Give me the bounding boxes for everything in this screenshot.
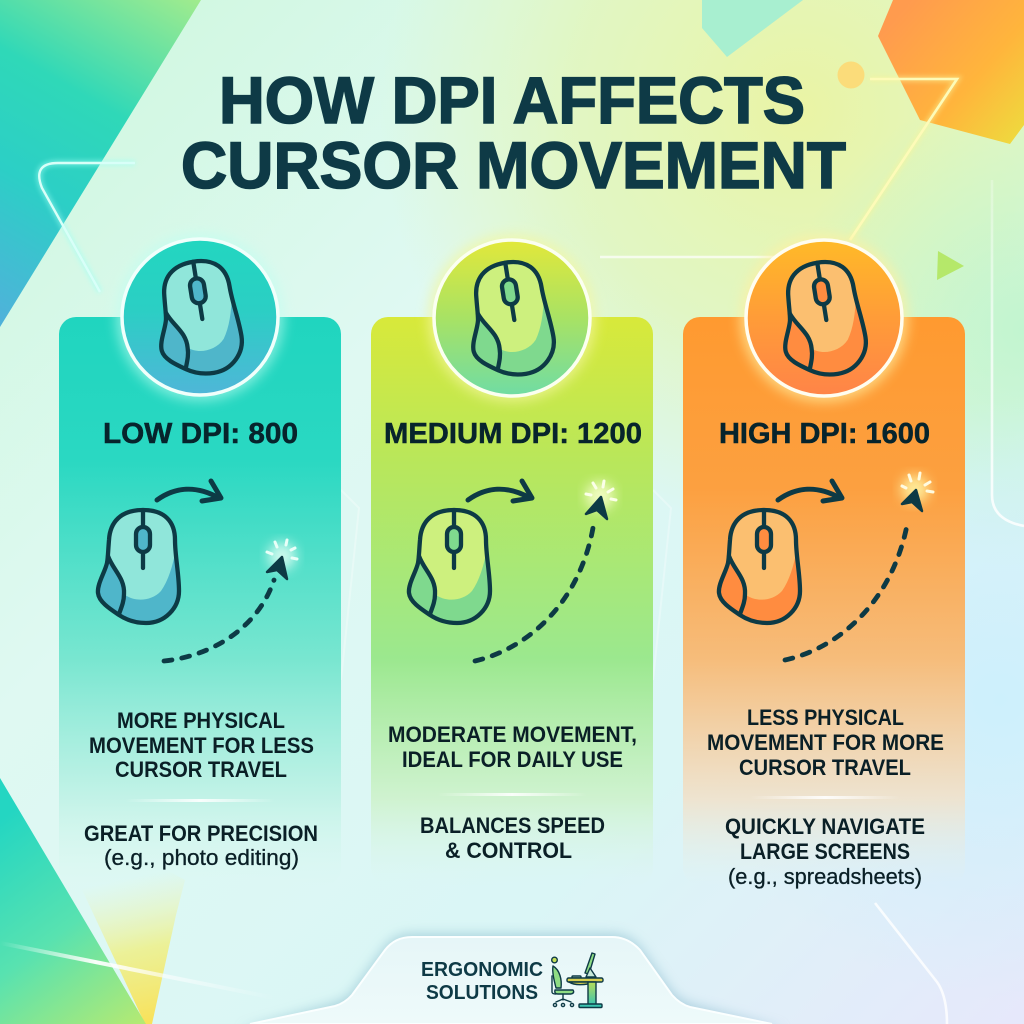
text: low dpi description: MOVEMENT FOR LESS <box>89 733 314 758</box>
text: high dpi description <box>707 705 944 780</box>
text: medium dpi benefit: & CONTROL <box>445 838 572 863</box>
arrow: dashed cursor path <box>475 481 616 661</box>
panel: brand footer <box>240 934 785 1024</box>
text: brand name: ERGONOMIC <box>421 959 543 981</box>
heading: medium dpi: MEDIUM DPI: 1200 <box>384 418 642 450</box>
icon: high dpi mouse badge <box>746 240 902 396</box>
arrow: mouse movement <box>157 481 221 501</box>
text: low dpi description <box>89 708 314 782</box>
panel: medium dpi <box>371 234 653 885</box>
text: brand name <box>421 959 543 1004</box>
text: low dpi description: MORE PHYSICAL <box>117 708 285 733</box>
arrow: dashed cursor path <box>785 473 933 660</box>
arrow: dashed cursor path <box>164 540 297 661</box>
text: low dpi description: CURSOR TRAVEL <box>115 757 287 782</box>
arrow: mouse movement <box>468 481 532 501</box>
text: medium dpi benefit <box>420 813 605 863</box>
text: low dpi benefit: GREAT FOR PRECISION <box>84 821 318 846</box>
title <box>181 63 846 202</box>
arrow: mouse movement <box>778 481 842 501</box>
text: brand name: SOLUTIONS <box>426 982 538 1004</box>
panel: high dpi <box>683 234 965 889</box>
panel: low dpi <box>59 233 341 885</box>
heading: high dpi: HIGH DPI: 1600 <box>719 418 930 450</box>
text: high dpi benefit: (e.g., spreadsheets) <box>728 864 922 889</box>
text: high dpi benefit: LARGE SCREENS <box>740 839 910 864</box>
text: low dpi benefit: (e.g., photo editing) <box>104 845 299 870</box>
text: high dpi benefit: QUICKLY NAVIGATE <box>725 814 925 839</box>
text: medium dpi description <box>388 722 637 772</box>
text: high dpi description: MOVEMENT FOR MORE <box>707 730 944 755</box>
heading: low dpi: LOW DPI: 800 <box>103 418 298 450</box>
icon: low dpi mouse badge <box>122 239 278 395</box>
text: high dpi benefit <box>725 814 925 889</box>
text: medium dpi description: MODERATE MOVEMENT, <box>388 722 637 747</box>
text: low dpi benefit <box>84 821 318 870</box>
icon: mouse <box>98 510 179 623</box>
title: CURSOR MOVEMENT <box>181 128 846 202</box>
icon: medium dpi mouse badge <box>434 240 590 396</box>
text: high dpi description: LESS PHYSICAL <box>747 705 904 730</box>
icon: ergonomic desk and chair <box>552 953 603 1008</box>
text: medium dpi benefit: BALANCES SPEED <box>420 813 605 838</box>
icon: mouse <box>409 510 490 623</box>
title: HOW DPI AFFECTS <box>219 63 805 137</box>
text: medium dpi description: IDEAL FOR DAILY USE <box>402 747 623 772</box>
icon: mouse <box>719 510 800 623</box>
text: high dpi description: CURSOR TRAVEL <box>739 755 911 780</box>
